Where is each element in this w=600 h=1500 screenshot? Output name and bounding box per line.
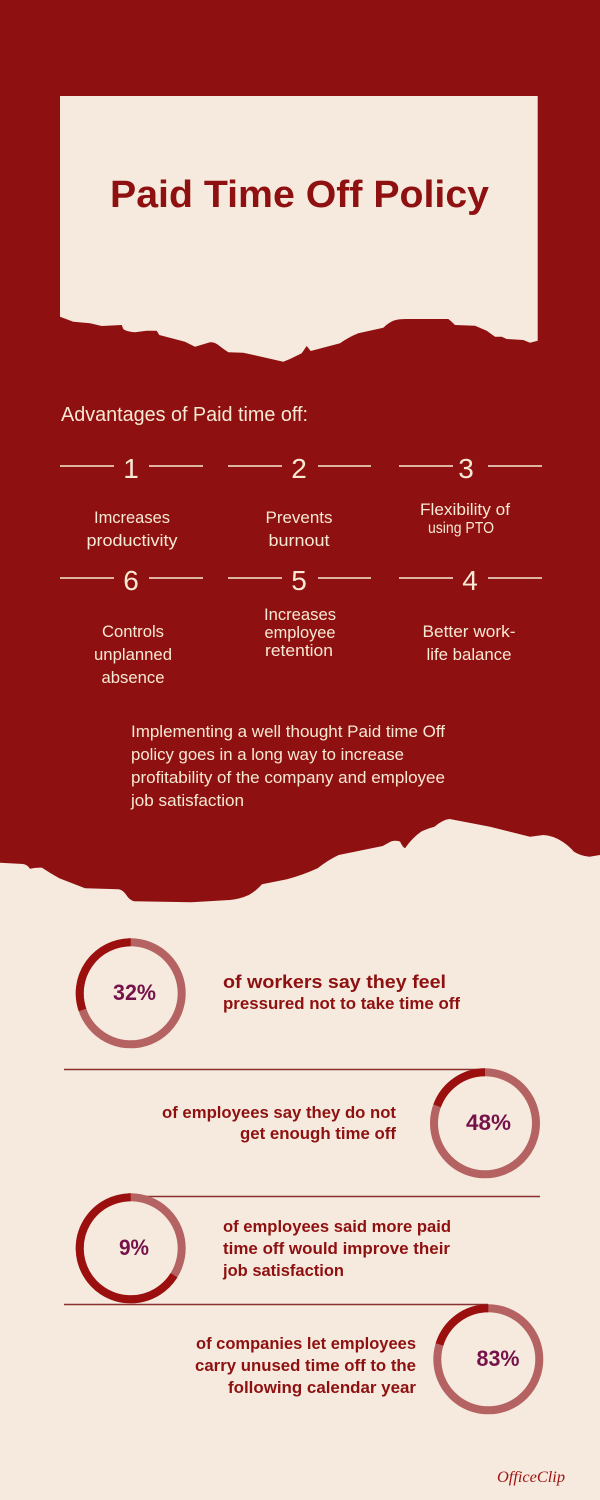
stat text: of companies let employees [196,1334,416,1353]
donut 9%: 9% [119,1235,149,1260]
donut 48%: 48% [466,1110,511,1135]
title: Paid Time Off Policy [110,174,489,216]
advantage 5 [228,565,371,660]
stat: 48% [162,1072,536,1174]
stat text: get enough time off [240,1124,396,1143]
stat text [222,1217,451,1280]
donut 83% [437,1308,539,1410]
advantage 5: 5 [291,565,307,596]
advantage 3 [399,453,542,537]
stat text: of employees said more paid [223,1217,451,1236]
red background panel with torn lower edge [0,0,600,902]
stat text [223,972,460,1013]
advantage 6: 6 [123,565,139,596]
paragraph: implementing policy: profitability of the company and employee [131,768,445,787]
stat text: following calendar year [228,1378,416,1397]
advantage 6 [60,565,203,687]
donut 48% [434,1072,536,1174]
stat text [162,1103,396,1143]
stat: 83% [195,1308,539,1410]
stat text: of workers say they feel [223,972,446,992]
stat text: of employees say they do not [162,1103,396,1122]
stat text: pressured not to take time off [223,994,460,1013]
stat text [195,1334,416,1397]
advantage 6: absence [102,668,164,687]
advantage 3: 3 [458,453,474,484]
advantage 1: Imcreases [94,508,170,527]
advantage 5: retention [265,641,333,660]
donut 83%: 83% [476,1346,520,1371]
advantage 5: Increases [264,605,336,624]
advantage 1: 1 [123,453,139,484]
stat: 9% [80,1197,451,1299]
advantage 4: 4 [462,565,478,596]
paragraph: implementing policy [130,722,445,810]
donut 32%: 32% [113,980,156,1005]
advantage 2 [228,453,371,550]
advantage 6: Controls [102,622,164,641]
advantage 2: 2 [291,453,307,484]
paragraph: implementing policy: Implementing a well thought Paid time Off [131,722,445,741]
advantage 2: burnout [268,531,330,550]
advantage 4: life balance [426,645,512,664]
paragraph: implementing policy: policy goes in a long way to increase [131,745,404,764]
advantage 1 [60,453,203,550]
advantage 2: Prevents [266,508,332,527]
stat text: time off would improve their [223,1239,450,1258]
donut 9% [80,1197,182,1299]
advantage 3: using PTO [428,520,494,537]
paragraph: implementing policy: job satisfaction [130,791,244,810]
stat text: job satisfaction [222,1261,344,1280]
advantage 1: productivity [86,531,178,550]
stat text: carry unused time off to the [195,1356,416,1375]
advantage 4: Better work- [422,622,516,641]
advantage 4 [399,565,542,664]
logo: OfficeClip: OfficeClip [497,1469,565,1486]
stat: 32% [80,942,460,1044]
donut 32% [80,942,182,1044]
title card with torn edge [60,96,538,362]
heading: advantages: Advantages of Paid time off: [61,404,308,426]
advantage 6: unplanned [94,645,172,664]
advantage 3: Flexibility of [420,500,510,519]
advantage 5: employee [264,623,336,642]
